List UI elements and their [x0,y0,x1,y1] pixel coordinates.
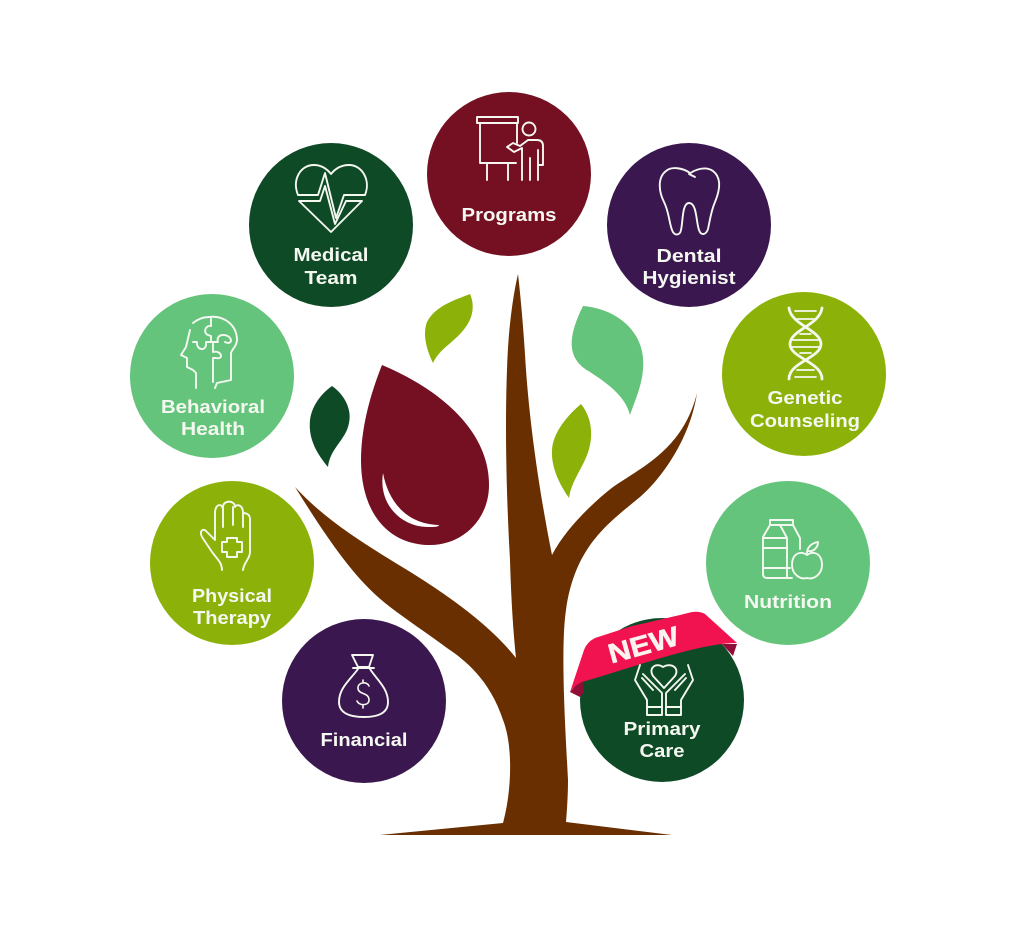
label: Primary Care: Care [640,741,684,761]
circle: Behavioral Health [130,294,294,458]
circle: Dental Hygienist [607,143,771,307]
label: Behavioral Health: Behavioral [161,397,265,417]
leaf: lime right [552,404,591,498]
label: Dental Hygienist: Hygienist [642,268,736,288]
ribbon tail: left fold [570,678,584,697]
label: Genetic Counseling: Genetic [768,388,842,408]
leaf: light green upper right [572,306,643,415]
leaf: dark green left [310,386,350,467]
icon: money bag [339,655,388,717]
label: Dental Hygienist: Dental [656,246,722,266]
label: Physical Therapy: Therapy [193,608,271,628]
tree trunk and branches [295,274,697,835]
label: Behavioral Health [161,397,265,439]
icon: head with puzzle [181,317,237,388]
icon: heart with pulse [296,165,367,232]
circle: Genetic Counseling [722,292,886,456]
drop highlight [382,473,439,527]
label: Medical Team [294,245,368,288]
ribbon: NEW [570,612,737,692]
ribbon text: NEW [605,620,682,669]
label: Programs: Programs [462,205,556,225]
label: Genetic Counseling: Counseling [750,411,860,431]
label: Dental Hygienist [642,246,736,288]
icon: presenter at board [477,117,543,180]
label: Financial: Financial [320,730,408,750]
large burgundy drop [361,365,489,545]
icon: hands holding heart [635,665,693,715]
circle: Programs [427,92,591,256]
label: Medical Team: Team [304,268,358,288]
icon: DNA helix [789,308,822,379]
circle: Physical Therapy [150,481,314,645]
icon: milk carton and apple [763,520,822,578]
label: Genetic Counseling [750,388,860,431]
label: Medical Team: Medical [294,245,368,265]
circle: Primary Care [570,612,744,782]
label: Physical Therapy: Physical [192,586,272,606]
label: Nutrition: Nutrition [744,592,832,612]
icon: hand with cross [201,502,250,570]
label: Primary Care: Primary [624,719,700,739]
circle: Medical Team [249,143,413,307]
circle: Financial [282,619,446,783]
label: Primary Care [624,719,700,761]
icon: tooth [660,168,719,234]
circle: Nutrition [706,481,870,645]
ribbon tail: right fold [722,644,737,656]
label: Behavioral Health: Health [181,419,245,439]
leaf: lime upper left [425,294,473,363]
label: Physical Therapy [192,586,272,628]
